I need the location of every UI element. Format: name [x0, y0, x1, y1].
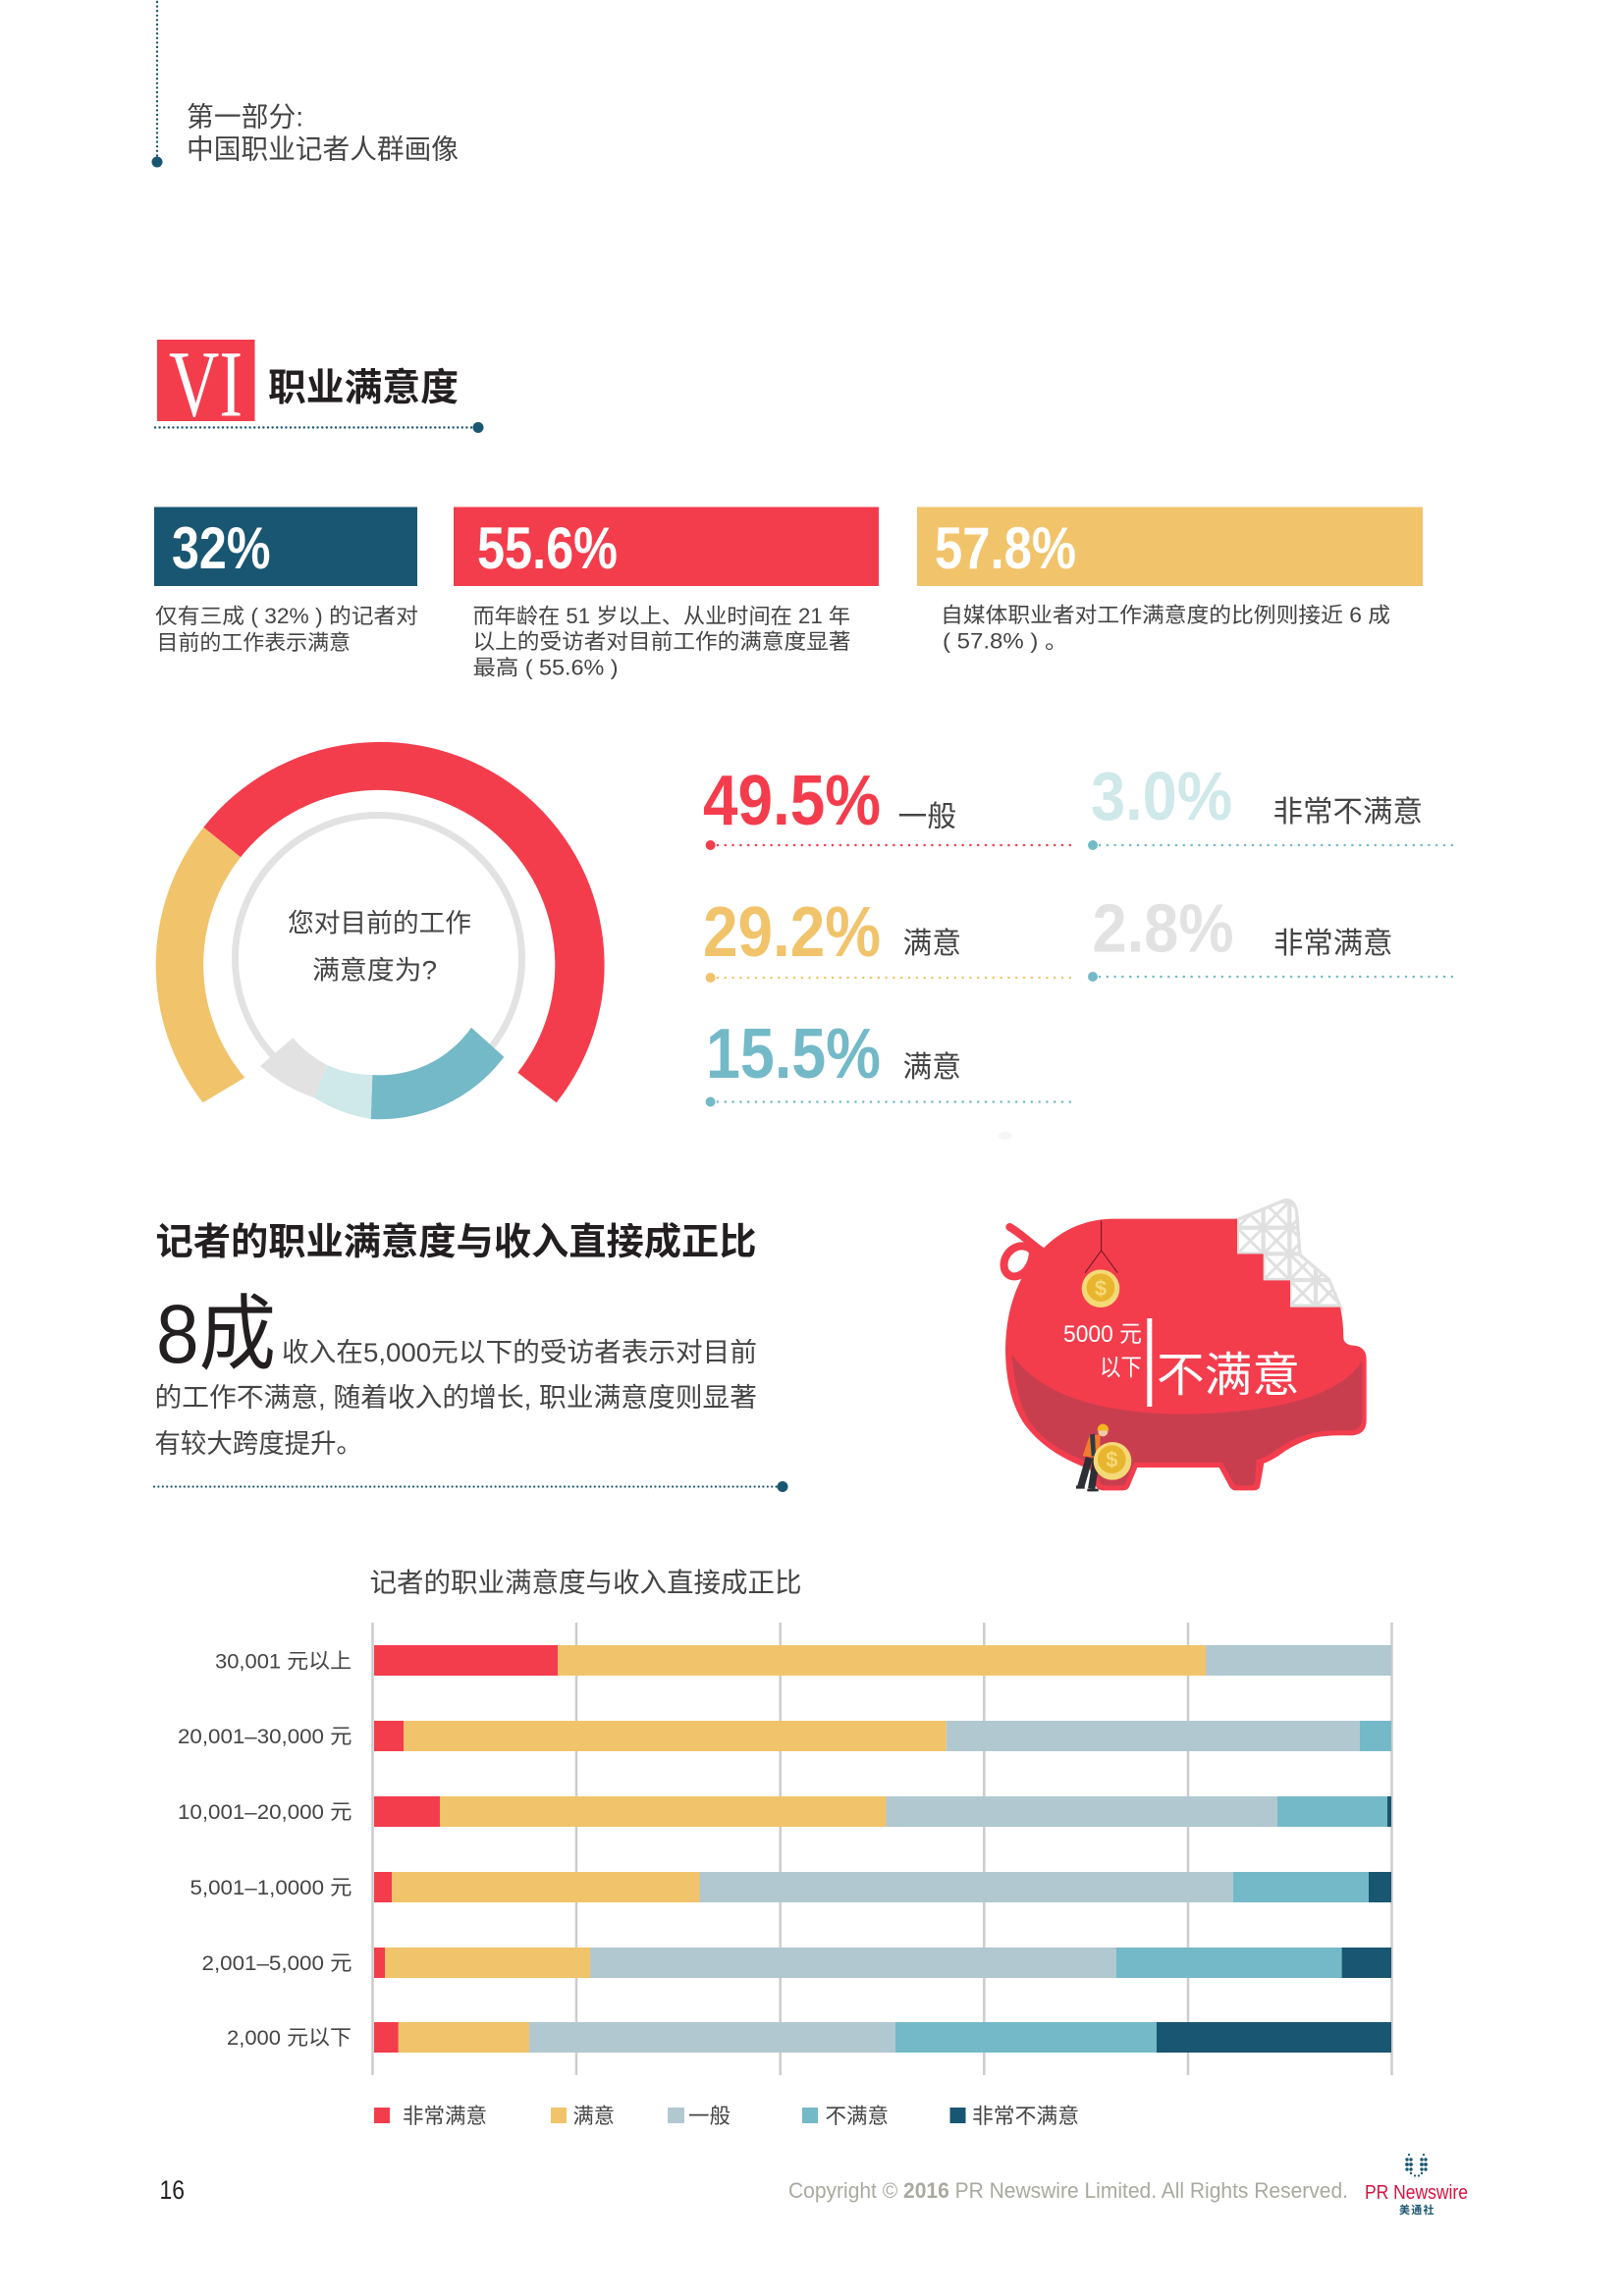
panel: 55.6% stat: [454, 507, 879, 679]
bar chart: satisfaction by income: [178, 1623, 1392, 2075]
chart legend: 非常满意: [403, 2105, 487, 2128]
stat: 15.5% satisfied: 15.5%: [706, 1015, 881, 1094]
panel: 32% stat: 目前的工作表示满意: [157, 630, 351, 655]
row: 20,001-30,000: [178, 1721, 1391, 1751]
chart title: 记者的职业满意度与收入直接成正比: [369, 1567, 801, 1598]
logo: PR Newswire: [1365, 2154, 1468, 2216]
row: 10,001-20,000: 10,001–20,000 元: [178, 1800, 352, 1824]
row: below 2,000: [227, 2022, 1391, 2053]
copyright notice: Copyright © 2016 PR Newswire Limited. All Rights Reserved.: [788, 2178, 1348, 2203]
bar divider: [1147, 1318, 1152, 1407]
section heading: VI career satisfaction: 职业满意度: [268, 367, 459, 409]
panel: 57.8% stat: 57.8%: [935, 515, 1076, 581]
stat: 15.5% satisfied: [706, 1015, 1070, 1107]
pig label: dissatisfied: 不满意: [1157, 1350, 1300, 1402]
row: 2,001-5,000: [202, 1948, 1391, 1978]
icon: worker pushing coin: $: [1106, 1448, 1117, 1472]
panel: 55.6% stat: 以上的受访者对目前工作的满意度显著: [473, 629, 850, 654]
panel: 32% stat: [154, 507, 418, 655]
stat: 49.5% general: 一般: [897, 801, 956, 833]
icon: hanging coin: $: [1095, 1276, 1107, 1301]
stat: 29.2% satisfied: [703, 893, 1070, 983]
heading: income and satisfaction: 记者的职业满意度与收入直接成正比: [155, 1221, 756, 1263]
stat: 49.5% general: 49.5%: [703, 762, 881, 840]
row: 5,001-10,000: 5,001–1,0000 元: [190, 1876, 352, 1899]
row: below 2,000: 2,000 元以下: [227, 2026, 352, 2050]
icon: pig body: [1005, 1219, 1367, 1490]
row: 20,001-30,000: 20,001–30,000 元: [178, 1725, 352, 1748]
donut chart: job satisfaction: 您对目前的工作: [288, 909, 471, 938]
icon: logo dots: [1405, 2154, 1428, 2177]
row: 5,001-10,000: [190, 1872, 1391, 1902]
section heading: VI career satisfaction: [155, 332, 483, 436]
section heading: VI career satisfaction: VI: [169, 332, 243, 436]
panel: 32% stat: 32%: [172, 515, 271, 581]
row: above 30,001: [215, 1645, 1391, 1676]
icon: pig tail: [1003, 1227, 1043, 1276]
page number: 16: [159, 2175, 185, 2205]
chart legend: 不满意: [825, 2105, 889, 2128]
panel: 57.8% stat: [917, 507, 1423, 654]
stat: 3.0% very dissatisfied: 3.0%: [1091, 758, 1232, 834]
illustration: piggy bank: [1003, 1201, 1367, 1491]
icon: truss scaffold: [1235, 1201, 1341, 1308]
panel: 57.8% stat: ( 57.8% ) 。: [943, 628, 1068, 654]
stat: 49.5% general: [703, 762, 1070, 850]
icon: hanging coin: [1082, 1220, 1119, 1308]
donut chart: job satisfaction: [156, 742, 605, 1119]
chart legend: 非常不满意: [972, 2105, 1079, 2128]
chart legend: 一般: [688, 2105, 731, 2128]
stat: 2.8% very satisfied: [1088, 889, 1453, 982]
panel: 55.6% stat: 55.6%: [477, 515, 618, 581]
section marker: 中国职业记者人群画像: [187, 133, 459, 165]
stat: 3.0% very dissatisfied: [1088, 758, 1453, 850]
panel: 55.6% stat: 而年龄在 51 岁以上、从业时间在 21 年: [473, 604, 850, 628]
panel: 55.6% stat: 最高 ( 55.6% ): [473, 656, 619, 679]
text block: 80 percent under 5000 yuan: 有较大跨度提升。: [155, 1429, 362, 1459]
stat: 29.2% satisfied: 29.2%: [703, 893, 881, 972]
row: 10,001-20,000: [178, 1796, 1391, 1827]
chart legend: [374, 2105, 1079, 2128]
text block: 80 percent under 5000 yuan: [154, 1288, 787, 1492]
stat: 2.8% very satisfied: 2.8%: [1092, 889, 1233, 966]
text block: 80 percent under 5000 yuan: 收入在5,000元以下的受访者表示对目前: [282, 1338, 757, 1367]
stat: 29.2% satisfied: 满意: [903, 928, 961, 960]
pig label: under 5000 yuan: 以下: [1100, 1355, 1142, 1381]
panel: 32% stat: 仅有三成 ( 32% ) 的记者对: [155, 604, 418, 628]
row: 2,001-5,000: 2,001–5,000 元: [202, 1951, 352, 1975]
stat: 2.8% very satisfied: 非常满意: [1273, 928, 1392, 960]
section marker: 第一部分:: [187, 102, 303, 132]
chart legend: 满意: [573, 2105, 615, 2128]
pig label: under 5000 yuan: [1063, 1321, 1142, 1381]
row: above 30,001: 30,001 元以上: [215, 1649, 352, 1673]
donut chart: job satisfaction: 满意度为?: [312, 956, 437, 986]
text block: 80 percent under 5000 yuan: 8成: [156, 1288, 276, 1380]
stat: 3.0% very dissatisfied: 非常不满意: [1272, 796, 1423, 828]
logo: PR Newswire: PR Newswire: [1365, 2182, 1468, 2204]
pig label: under 5000 yuan: 5000 元: [1063, 1321, 1142, 1348]
logo: PR Newswire: 美通社: [1399, 2203, 1434, 2216]
stat: 15.5% satisfied: 满意: [903, 1051, 961, 1084]
text block: 80 percent under 5000 yuan: 的工作不满意, 随着收入的增长, 职业满意度则显著: [155, 1383, 757, 1413]
icon: worker pushing coin: [1076, 1424, 1131, 1491]
panel: 57.8% stat: 自媒体职业者对工作满意度的比例则接近 6 成: [941, 603, 1390, 627]
icon: pig belly shade: [1012, 1355, 1362, 1485]
section marker: [151, 2, 459, 167]
